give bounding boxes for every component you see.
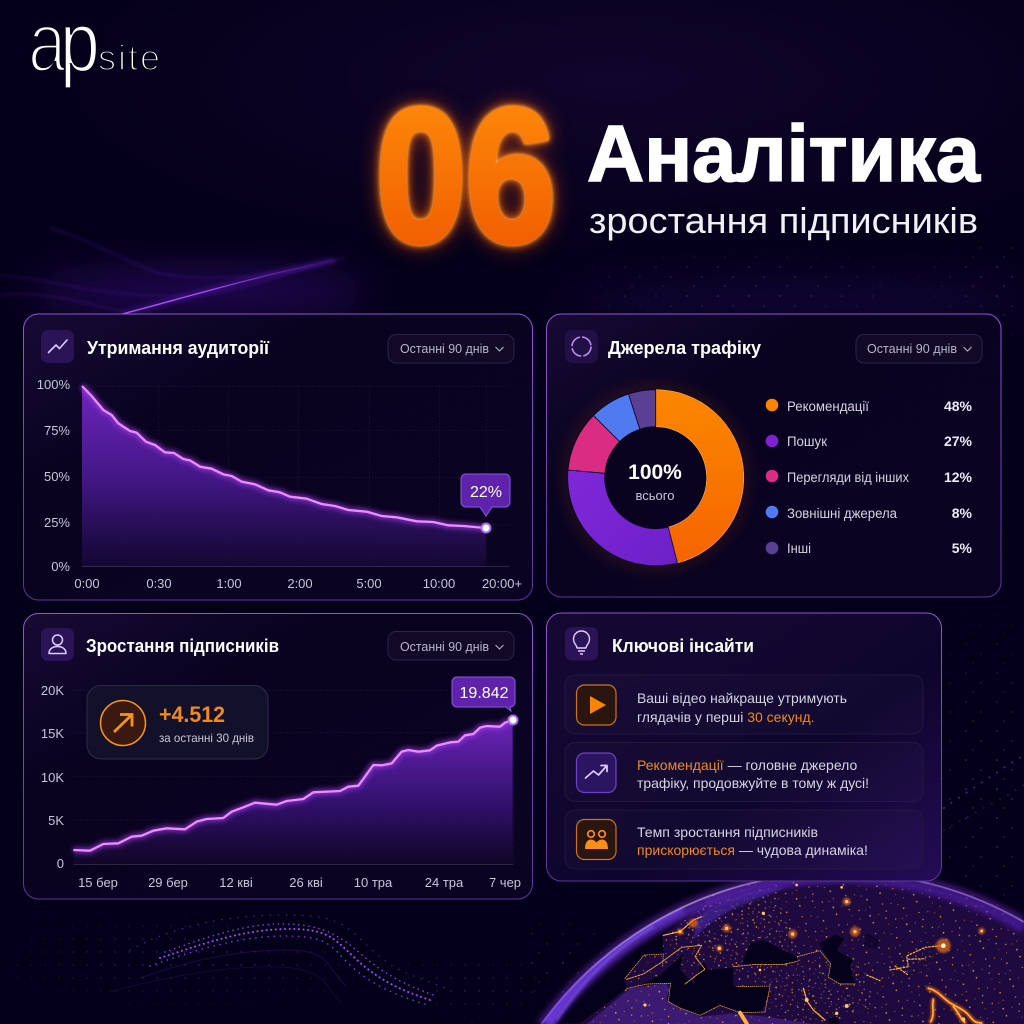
x axis labels: 10:00 (423, 576, 455, 591)
x axis labels: 7 чер (489, 875, 521, 890)
y axis labels: 0 (57, 856, 64, 871)
legend: Перегляди від інших (787, 470, 909, 485)
callout: +4.512: +4.512 (159, 702, 225, 727)
atmosphere haze (693, 887, 787, 940)
logo: site (98, 37, 160, 78)
legend: 27% (944, 433, 973, 449)
dotted wave bottom left (0, 755, 1024, 1024)
globe (535, 878, 1024, 1024)
icon: people (576, 820, 616, 860)
y axis labels: 75% (44, 423, 70, 438)
subtitle: зростання підписників (589, 200, 978, 241)
x axis labels: 0:30 (146, 576, 172, 591)
y axis labels: 100% (37, 377, 70, 392)
panel: subscriber growth (24, 614, 532, 899)
panel: traffic sources (546, 314, 1001, 597)
y axis labels: 0% (51, 559, 70, 574)
legend: Зовнішні джерела (787, 506, 897, 521)
x axis labels: 20:00+ (482, 576, 522, 591)
y axis labels: 50% (44, 469, 70, 484)
insight 3: Темп зростання підписників (637, 824, 818, 840)
donut chart (568, 390, 744, 566)
marker: 22%: 22% (470, 484, 502, 501)
y axis labels: 15K (41, 726, 64, 741)
y axis labels (37, 377, 70, 574)
icon: person (41, 628, 74, 661)
legend (766, 398, 973, 556)
insight 1: глядачів у перші 30 секунд. (637, 709, 815, 725)
icon: trend line (41, 330, 74, 363)
panel: key insights (546, 613, 942, 881)
callout: +4.512 (87, 686, 268, 759)
insight 3: прискорюється — чудова динаміка! (637, 842, 868, 858)
insight 1 (565, 675, 923, 734)
retention line chart (37, 377, 522, 591)
donut centre: всього (636, 488, 674, 503)
legend: Інші (787, 541, 811, 556)
heading: Зростання підписників (86, 636, 279, 656)
light waves top left (0, 228, 345, 314)
y axis labels: 5K (48, 813, 64, 828)
marker: 19.842: 19.842 (460, 685, 509, 702)
legend: Пошук (787, 434, 827, 449)
x axis labels (74, 576, 522, 591)
y axis labels (41, 683, 64, 871)
insight 2 (565, 742, 923, 802)
marker: 22% (461, 474, 510, 532)
heading: Утримання аудиторії (87, 338, 270, 358)
marker: 19.842 (452, 677, 518, 724)
legend: 8% (952, 505, 973, 521)
period dropdown (388, 334, 514, 363)
x axis labels: 2:00 (287, 576, 313, 591)
title number 06: 06 (376, 70, 556, 282)
x axis labels: 0:00 (74, 576, 100, 591)
legend: 12% (944, 469, 973, 485)
dot fields (520, 240, 1024, 1024)
x axis labels: 15 бер (78, 875, 118, 890)
x axis labels: 29 бер (148, 875, 188, 890)
x axis labels: 10 тра (354, 875, 393, 890)
city hotspots (643, 884, 985, 1021)
period dropdown (856, 334, 982, 363)
legend: Рекомендації (787, 399, 869, 414)
heading: Джерела трафіку (608, 338, 761, 358)
period dropdown: Останні 90 днів (400, 341, 489, 356)
x axis labels (78, 875, 521, 890)
insight 2: Рекомендації — головне джерело (637, 757, 857, 773)
insight 3 (565, 810, 923, 869)
period dropdown: Останні 90 днів (400, 639, 489, 654)
growth line chart (41, 683, 521, 890)
donut centre: 100% (628, 461, 682, 484)
x axis labels: 12 кві (219, 875, 253, 890)
coast lights (625, 917, 982, 1023)
callout: +4.512: за останні 30 днів (159, 731, 254, 745)
x axis labels: 24 тра (425, 875, 464, 890)
y axis labels: 20K (41, 683, 64, 698)
period dropdown (388, 632, 514, 660)
icon: play (576, 685, 616, 725)
insight 1: Ваші відео найкраще утримують (637, 690, 847, 706)
legend: 5% (952, 540, 973, 556)
icon: light bulb (565, 627, 598, 660)
y axis labels: 10K (41, 770, 64, 785)
y axis labels: 25% (44, 515, 70, 530)
seas (542, 899, 880, 1024)
legend: 48% (944, 398, 973, 414)
insight 2: трафіку, продовжуйте в тому ж дусі! (637, 775, 869, 791)
icon: growth arrow (576, 753, 616, 792)
panel: audience retention (24, 314, 532, 600)
x axis labels: 5:00 (356, 576, 382, 591)
logo (28, 0, 160, 90)
icon: arrow up right (100, 700, 146, 746)
x axis labels: 26 кві (289, 875, 323, 890)
x axis labels: 1:00 (216, 576, 242, 591)
heading: Ключові інсайти (612, 636, 754, 656)
icon: ring (565, 330, 598, 363)
title: Аналітика (587, 109, 980, 198)
period dropdown: Останні 90 днів (867, 341, 957, 356)
donut centre (628, 461, 682, 503)
